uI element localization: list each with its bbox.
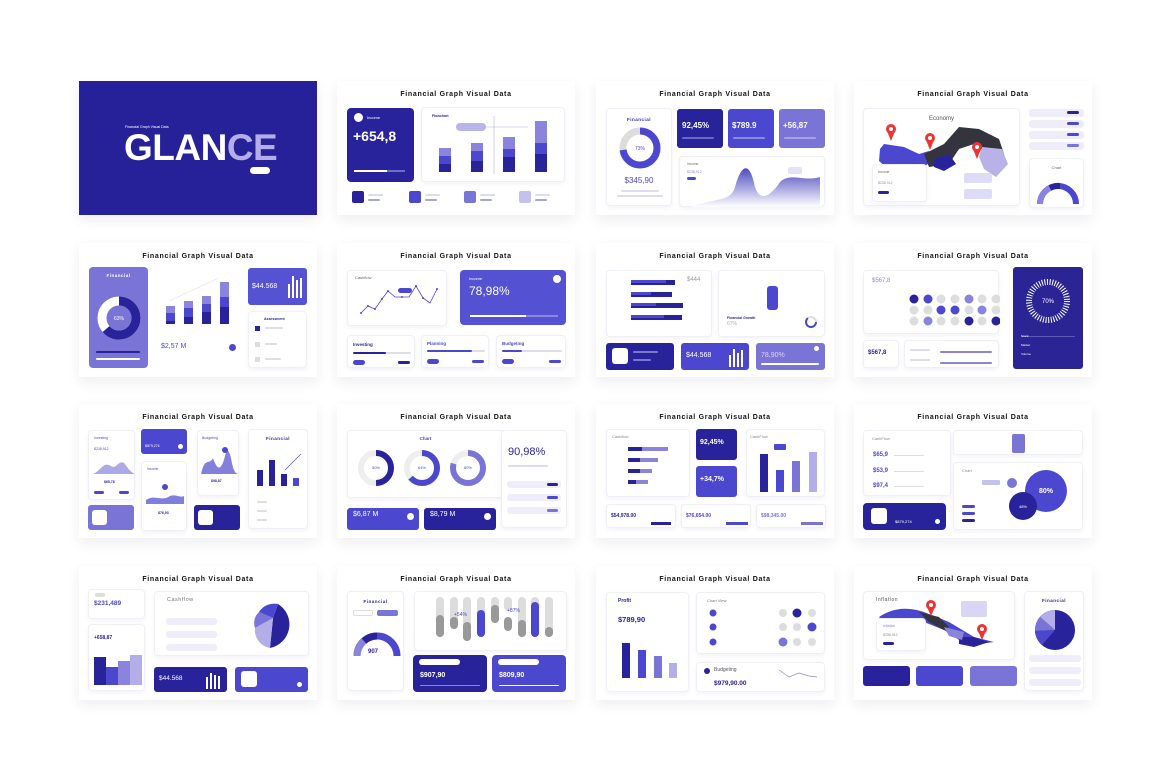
cover title: GLANCE [124,127,277,168]
progress card [904,340,999,368]
profit card: $789,90 [618,615,645,624]
wave chart card: $238,912 [687,170,702,174]
financial gauge card [347,591,404,691]
cover pill button [250,167,270,174]
title: Financial Graph Visual Data [659,414,771,421]
KPI card lavender [779,109,825,148]
investing navy KPI [696,429,737,460]
small value card [863,340,899,368]
purple donut panel: Financial [106,273,130,278]
investing navy card: $907,90 [420,672,445,679]
title: Financial Graph Visual Data [659,576,771,583]
slide 9: investing / income / budgeting [79,404,317,538]
financial navy card [863,503,946,530]
cashflow values card [863,430,951,496]
horizontal cashflow card: Cashflow [612,434,628,439]
donut chart card [347,430,504,498]
bubble chart card: 48% [1019,504,1027,509]
small value card: $567,8 [868,350,886,356]
bottom value card 3 [756,504,826,528]
income card: +654,8 [353,128,396,144]
income card [347,108,414,182]
radial progress panel [1013,267,1083,369]
slide 15: profit + chart view [596,566,834,700]
donut card: Financial [627,117,651,122]
budgeting card: Budgeting [502,341,524,346]
horizontal bar card [606,270,712,337]
budgeting blue KPI [696,466,737,497]
capsule bar chart card [414,591,567,651]
map card: Income [878,170,889,174]
financial gauge card: 907 [368,649,378,655]
income card [141,461,187,531]
percentage card [501,430,567,528]
title: Financial Graph Visual Data [142,253,254,260]
slide 4: economy map [854,81,1092,215]
financial gauge card: Financial [363,599,388,604]
radial progress panel: Market [1021,343,1030,347]
investing navy KPI: 92,45% [700,439,724,446]
slide 10: three donuts [337,404,575,538]
slide 6: cashflow line + income [337,243,575,377]
investing card: $238,912 [94,447,109,451]
slide 13: cashflow pie [79,566,317,700]
budgeting blue card: $809,90 [499,672,524,679]
balance card navy [606,343,674,370]
planning card: Planning [427,341,446,346]
donut chart card: 50% [372,465,380,470]
inflation map card: $238,912 [883,633,898,637]
budgeting card: $979,90.00 [714,680,747,687]
bottom icon stats row [352,191,550,203]
navy value card [424,508,496,530]
investing card: $65,78 [104,480,115,484]
horizontal cashflow card [606,429,690,497]
map card [863,108,1020,206]
bottom value card 2: $76,654.00 [686,513,711,519]
KPI card blue: $789.9 [732,121,756,130]
percent card lavender: 78,90% [761,352,785,359]
donut card [606,108,672,206]
cashflow pie card: 75% [290,625,301,631]
budgeting card: $98,87 [211,479,222,483]
budgeting blue KPI: +34,7% [700,476,724,483]
radial progress panel: 70% [1042,299,1055,305]
cashflow values card: $97,4 [873,483,888,489]
bottom value card 3: $98,345.00 [761,513,786,519]
value card [88,589,145,619]
blue value card [347,508,419,530]
bubble chart card [953,462,1083,530]
donut chart card: Chart [420,436,431,441]
lavender balance card [88,505,134,530]
title: Financial Graph Visual Data [400,91,512,98]
investing navy card [413,655,487,692]
KPI card navy: 92,45% [682,121,709,130]
profit card: Profit [618,598,631,604]
bar chart card [421,107,565,182]
blue value card: $6,87 M [353,511,378,518]
financial pie card [1024,591,1084,691]
slide 5: financial donut + bars [79,243,317,377]
donut chart card: 64% [418,465,426,470]
half donut chart card: Chart [1052,165,1061,170]
slide 7: horizontal bars + calendar [596,243,834,377]
purple donut panel: 63% [114,316,125,322]
investing card [88,430,135,500]
small navy card [863,666,910,686]
title: Financial Graph Visual Data [917,253,1029,260]
bottom value cards: $54,978.00 [611,513,636,519]
title: Financial Graph Visual Data [142,576,254,583]
cashflow pie card [154,591,309,656]
bubble chart card: 80% [1039,488,1054,495]
half donut chart card [1029,158,1084,208]
cashflow values card: $53,9 [873,468,888,474]
balance card: $44.568 [252,283,277,290]
title: Financial Graph Visual Data [917,576,1029,583]
donut card: 73% [635,146,646,152]
title: Financial Graph Visual Data [400,253,512,260]
chart view card: Chart View [707,598,726,603]
bottom value card 2 [681,504,751,528]
financial blue card [141,429,187,454]
total value: $2,57 M [161,343,186,350]
title: Financial Graph Visual Data [400,576,512,583]
dot matrix card: $567,8 [872,278,890,284]
budgeting card [197,430,239,496]
cover subtitle: Financial Graph Visual Data [125,125,169,129]
radial progress panel: Volume [1021,352,1031,356]
bubble chart card: Chart [962,468,972,473]
line chart card: Cashflow [355,275,371,280]
budgeting card: Budgeting [714,667,737,673]
financial bar card [248,429,308,529]
cashflow values card: $65,9 [873,452,888,458]
KPI card navy [677,109,723,148]
column chart card [746,429,825,497]
bar chart card: Flowchart [432,114,449,118]
inflation map card: Inflation [883,624,895,628]
dot matrix card [863,270,999,334]
cashflow values card: CashFlow [872,436,890,441]
budgeting card [496,335,566,368]
percent card lavender [756,343,825,370]
title: Financial Graph Visual Data [659,91,771,98]
slide 12: cashflow + bubbles [854,404,1092,538]
title: Financial Graph Visual Data [400,414,512,421]
income card: Income [367,115,380,120]
wave chart card: Income [687,162,698,166]
investing card [347,335,415,368]
chart view card [696,592,825,654]
navy balance card [154,667,227,692]
investing card: Investing [353,342,373,347]
title: Financial Graph Visual Data [142,414,254,421]
cashflow pie card: Cashflow [167,597,194,603]
calendar card: 67% [727,321,737,327]
navy value card: $8,79 M [430,511,455,518]
value card blue: $44.568 [686,352,711,359]
purple donut panel [89,267,148,368]
line chart card [347,270,447,326]
small lavender card [970,666,1017,686]
assessment list card: Assessment [264,317,285,321]
stacked bar chart [166,278,229,324]
slide 1: cover GLANCE [79,81,317,215]
map card: $238,912 [878,181,893,185]
financial blue card: $879,274 [145,444,160,448]
slide 16: inflation map + pie [854,566,1092,700]
bar chart card: +658,87 [94,635,112,641]
income percentage card: Income [469,276,482,281]
bottom value cards [606,504,676,528]
value card: $231,489 [94,600,121,607]
balance card [248,268,307,305]
calendar strip [953,430,1083,455]
radial progress panel: Stock [1021,334,1029,338]
bar chart card [88,624,145,691]
list card [1029,109,1084,150]
capsule bar chart card: +87% [507,608,520,614]
income card: $76,93 [158,511,169,515]
donut card: $345,90 [625,176,653,185]
financial pie card: Financial [1042,598,1066,603]
small blue card [916,666,963,686]
income percentage card: 78,98% [469,284,510,298]
value card blue [681,343,749,370]
slide 2: income + bar chart [337,81,575,215]
percentage card: 90,98% [508,446,545,458]
income card: Income [147,467,158,471]
calendar card: Financial Growth [727,316,755,320]
financial bar card: Financial [266,436,290,441]
inflation map card: Inflation [876,597,898,603]
slide 8: dot grid + radial panel [854,243,1092,377]
column chart card: CashFlow [750,434,768,439]
title: Financial Graph Visual Data [917,91,1029,98]
budgeting card: Budgeting [202,436,218,440]
navy balance card: $44.568 [159,675,182,682]
slide 14: gauge + capsule bars [337,566,575,700]
investing card: Investing [94,436,108,440]
income percentage card [460,270,566,325]
profit card [606,592,689,692]
budgeting blue card [492,655,566,692]
navy card [194,505,240,530]
donut chart card: 80% [464,465,472,470]
horizontal bar card: $444 [687,277,700,283]
assessment list card [248,311,307,368]
map card: Economy [929,116,954,122]
blue balance card [235,667,308,692]
title: Financial Graph Visual Data [917,414,1029,421]
financial navy card: $879,274 [895,519,912,524]
wave chart card [679,156,825,207]
slide 11: cashflow bars + KPIs [596,404,834,538]
planning card [421,335,489,368]
inflation map card [863,591,1015,660]
capsule bar chart card: +54% [454,612,467,618]
budgeting card [696,662,825,692]
calendar card [718,270,825,337]
slide 3: financial donut + KPI cards [596,81,834,215]
KPI card blue [728,109,774,148]
title: Financial Graph Visual Data [659,253,771,260]
KPI card lavender: +56,87 [783,121,808,130]
